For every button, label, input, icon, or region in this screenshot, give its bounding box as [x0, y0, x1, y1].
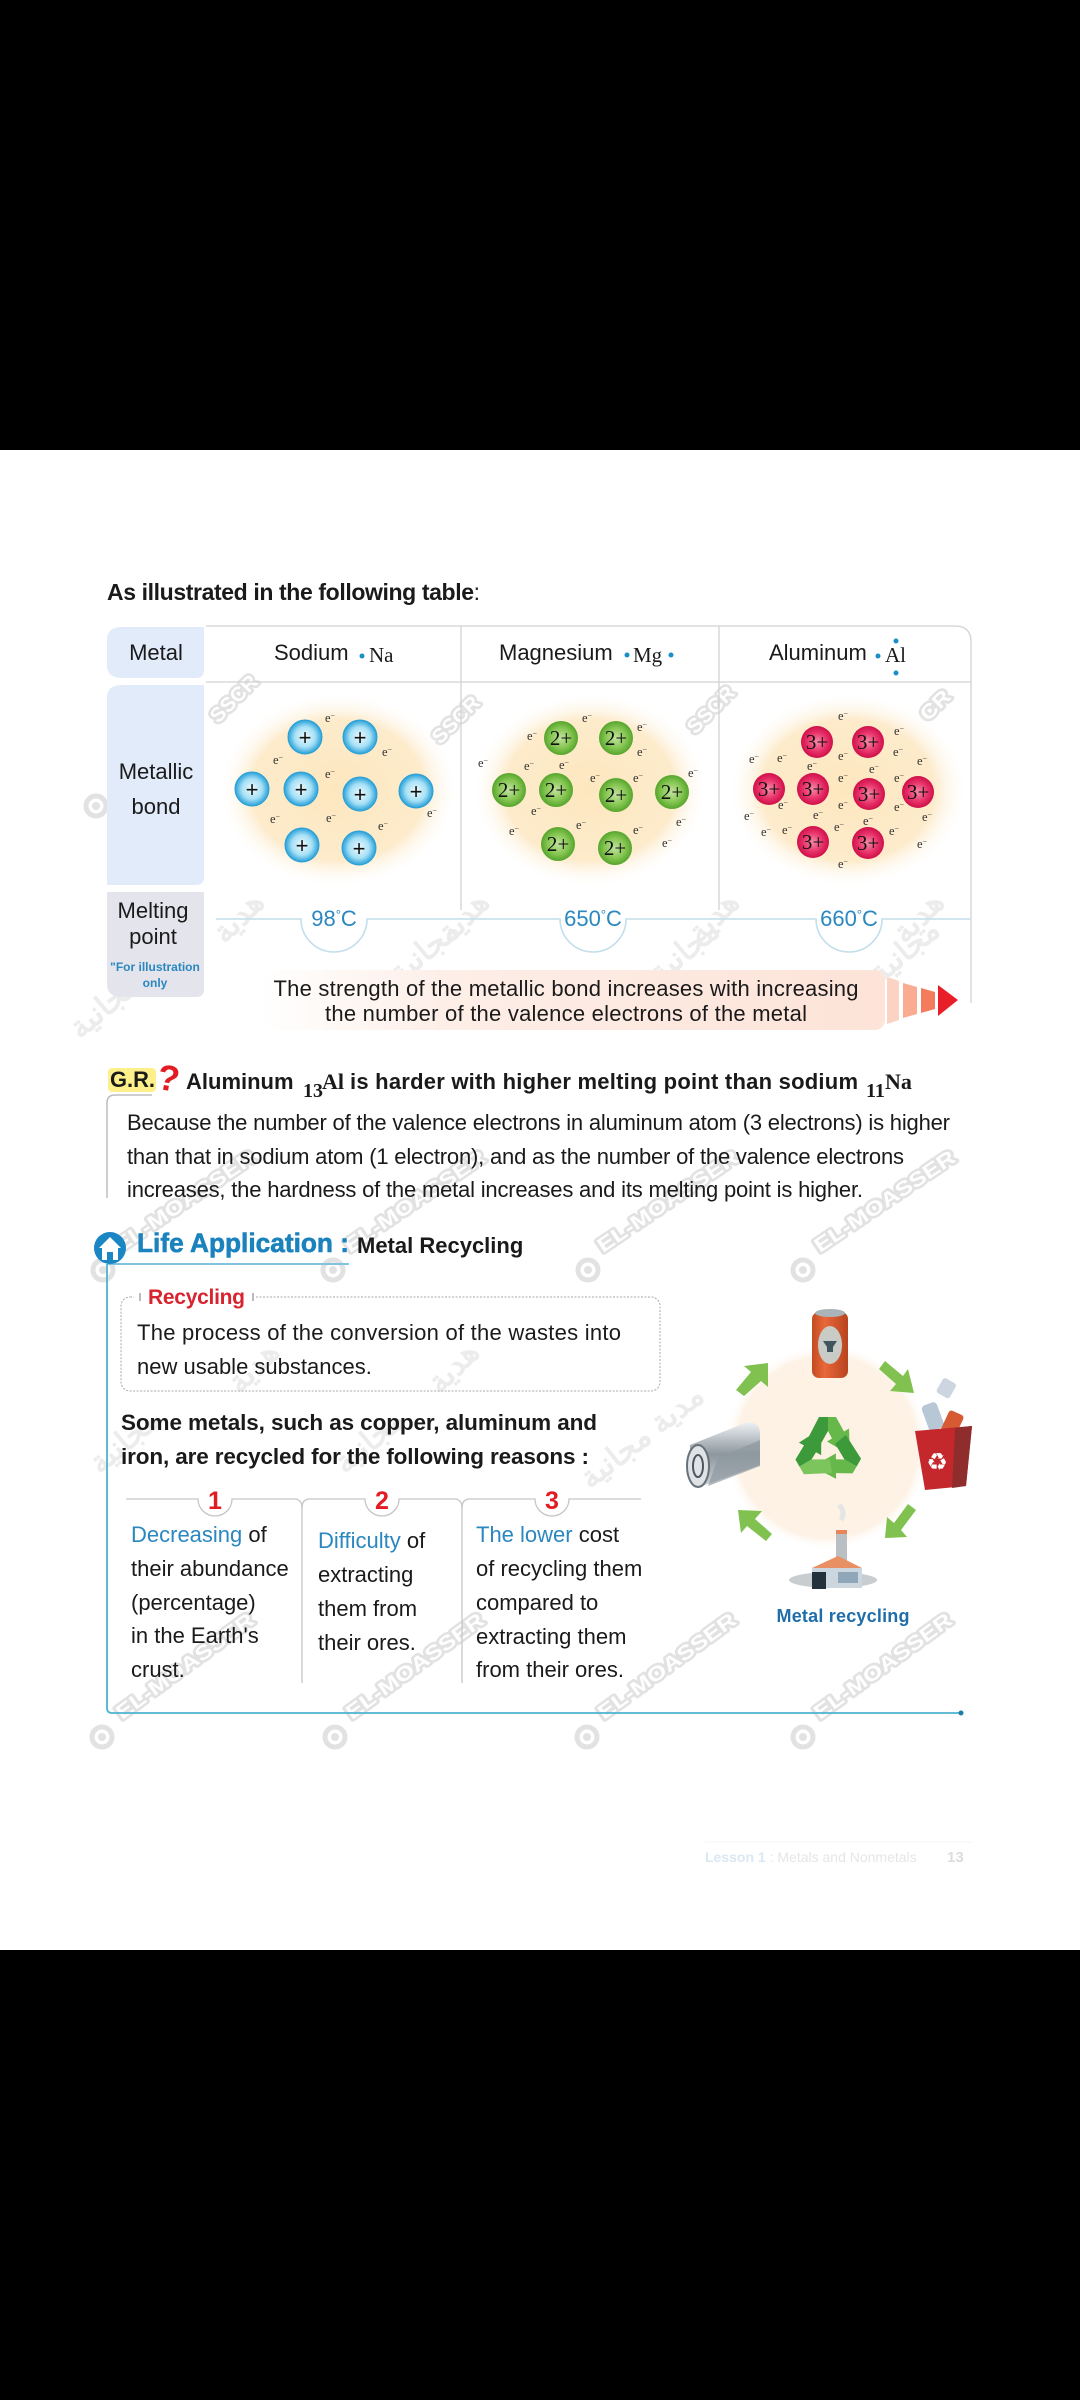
melting point scale: 650 [564, 906, 601, 931]
column header: Magnesium [499, 640, 674, 667]
row label: Metal [107, 627, 204, 678]
heading: life application [137, 1228, 523, 1258]
panel: recycling definition [121, 1286, 660, 1391]
reason 2: extracting [318, 1562, 413, 1587]
diagram: magnesium metallic bond: − [530, 759, 535, 768]
diagram: aluminum metallic bond: e [749, 752, 755, 766]
diagram: sodium metallic bond: e [273, 753, 279, 767]
G.R. answer bracket and text: than that in sodium atom (1 electron), and as the number of the valence electrons [127, 1144, 904, 1169]
G.R. answer bracket and text: Because the number of the valence electrons in aluminum atom (3 electrons) is higher [127, 1110, 950, 1135]
background glow [724, 1344, 930, 1550]
diagram: magnesium metallic bond: e [531, 804, 537, 818]
diagram: aluminum metallic bond: − [813, 759, 818, 768]
reason 2: their ores. [318, 1630, 416, 1655]
black band: bottom [0, 1950, 1080, 2400]
row label: Melting point [107, 892, 204, 997]
melting point scale: C [341, 906, 357, 931]
diagram: sodium metallic bond: + [295, 777, 307, 802]
diagram: magnesium metallic bond: 2+ [547, 832, 569, 856]
diagram: aluminum metallic bond: − [900, 724, 905, 733]
reason 1 [131, 1487, 289, 1682]
watermark layer: EL-MOASSER [810, 1146, 960, 1257]
diagram: magnesium metallic bond: e [559, 758, 565, 772]
reason 3: The lower cost [476, 1522, 619, 1547]
diagram: aluminum metallic bond: 3+ [857, 831, 879, 855]
diagram: aluminum metallic bond: 3+ [857, 730, 879, 754]
diagram: magnesium metallic bond: e [590, 771, 596, 785]
diagram: magnesium metallic bond: − [533, 729, 538, 738]
watermark layer: هدية [430, 884, 496, 950]
G.R. heading: Na [885, 1069, 912, 1094]
arrow: banner chevrons [887, 977, 958, 1024]
G.R. answer bracket and text [107, 1095, 950, 1202]
diagram: aluminum metallic bond [728, 692, 968, 888]
melting point scale: ° [601, 907, 606, 922]
watermark layer: مجانية [82, 1402, 166, 1480]
diagram: sodium metallic bond: + [354, 725, 366, 750]
reason 3: compared to [476, 1590, 598, 1615]
watermark layer: مجانية [642, 912, 726, 990]
reason 3: extracting them [476, 1624, 626, 1649]
diagram: aluminum metallic bond: 3+ [806, 730, 828, 754]
diagram: aluminum metallic bond: − [819, 808, 824, 817]
watermark layer: هدية [885, 884, 951, 950]
watermark layer: مدية مجانية [573, 1377, 710, 1496]
watermark layer: EL-MOASSER [594, 1609, 741, 1724]
diagram: aluminum metallic bond: − [869, 814, 874, 823]
diagram: magnesium metallic bond: e [576, 818, 582, 832]
diagram: aluminum metallic bond: e [894, 771, 900, 785]
diagram: sodium metallic bond: − [433, 806, 438, 815]
column header: Sodium: Sodium [274, 640, 349, 665]
heading: table intro: As illustrated in the following table: [107, 579, 480, 605]
diagram: aluminum metallic bond: e [813, 808, 819, 822]
reason 2: them from [318, 1596, 417, 1621]
icon: recycling symbol [788, 1417, 868, 1486]
column header: Magnesium: Magnesium [499, 640, 613, 665]
row label: Melting point: "For illustration [110, 960, 200, 974]
diagram: aluminum metallic bond: e [893, 745, 899, 759]
diagram: aluminum metallic bond: e [838, 857, 844, 871]
diagram: magnesium metallic bond: 2+ [605, 783, 627, 807]
reason 2 [318, 1487, 426, 1655]
watermark layer: هدية [220, 1334, 286, 1400]
diagram: sodium metallic bond: − [279, 753, 284, 762]
table frame [206, 626, 971, 1003]
diagram: aluminum metallic bond: e [917, 754, 923, 768]
banner: metallic bond strength: The strength of the metallic bond increases with increasing [274, 976, 858, 1001]
diagram: aluminum metallic bond: − [875, 762, 880, 771]
footer: page label [705, 1842, 972, 1866]
diagram: aluminum metallic bond: 3+ [802, 830, 824, 854]
panel frame: life application [107, 1264, 964, 1716]
icon: factory [789, 1505, 877, 1589]
text: reasons intro [121, 1410, 597, 1469]
diagram: magnesium metallic bond: − [588, 711, 593, 720]
G.R. badge: ? [154, 1056, 183, 1100]
column header: Aluminum: Aluminum [769, 640, 867, 665]
diagram: aluminum metallic bond: e [869, 762, 875, 776]
diagram: aluminum metallic bond: e [894, 800, 900, 814]
banner: metallic bond strength: the number of the valence electrons of the metal [325, 1001, 807, 1026]
row label: Melting point: point [129, 924, 177, 949]
melting point scale [216, 906, 971, 952]
diagram: aluminum metallic bond: e [863, 814, 869, 828]
diagram: sodium metallic bond: − [384, 819, 389, 828]
diagram: aluminum metallic bond: − [767, 825, 772, 834]
diagram: magnesium metallic bond: e [662, 836, 668, 850]
diagram: aluminum metallic bond: 3+ [907, 780, 929, 804]
watermark layer: مجانية [62, 967, 146, 1045]
G.R. heading: 11 [866, 1080, 885, 1102]
icon: home [94, 1232, 126, 1264]
diagram: magnesium metallic bond: e [582, 711, 588, 725]
diagram: sodium metallic bond: e [270, 812, 276, 826]
diagram: magnesium metallic bond: e [633, 823, 639, 837]
icon: metal roll [687, 1422, 760, 1487]
diagram: sodium metallic bond: e [326, 811, 332, 825]
G.R. badge: G.R. [110, 1067, 155, 1092]
black band: top [0, 0, 1080, 450]
diagram: aluminum metallic bond: − [928, 810, 933, 819]
G.R. heading: Aluminum [186, 1069, 294, 1094]
watermark layer: EL-MOASSER [340, 1146, 490, 1257]
row label: Melting point: Melting [118, 898, 188, 923]
reason 3: from their ores. [476, 1657, 624, 1682]
watermark layer: هدية [680, 884, 746, 950]
footer: page label: Lesson 1 : Metals and Nonmetals [705, 1849, 917, 1865]
figure caption: Metal recycling [776, 1606, 910, 1626]
reason 1: 1 [208, 1487, 222, 1515]
diagram: magnesium metallic bond: 2+ [604, 836, 626, 860]
diagram: sodium metallic bond: − [276, 812, 281, 821]
diagram: sodium metallic bond: e [382, 745, 388, 759]
reason 2: Difficulty of [318, 1528, 426, 1553]
diagram: sodium metallic bond: e [378, 819, 384, 833]
diagram: sodium metallic bond: − [331, 711, 336, 720]
diagram: magnesium metallic bond: e [509, 824, 515, 838]
diagram: aluminum metallic bond: e [838, 798, 844, 812]
diagram: aluminum metallic bond: 3+ [802, 777, 824, 801]
diagram: magnesium metallic bond: − [537, 804, 542, 813]
panel: recycling definition: Recycling [148, 1286, 245, 1309]
diagram: aluminum metallic bond: e [894, 724, 900, 738]
diagram: aluminum metallic bond: e [807, 759, 813, 773]
diagram: aluminum metallic bond: − [844, 749, 849, 758]
diagram: sodium metallic bond: e [325, 711, 331, 725]
reasons frame [126, 1499, 641, 1683]
diagram: sodium metallic bond: e [427, 806, 433, 820]
column header: Aluminum [769, 638, 906, 676]
diagram: magnesium metallic bond: 2+ [498, 778, 520, 802]
watermark layer: EL-MOASSER [112, 1609, 259, 1724]
diagram: aluminum metallic bond: − [844, 709, 849, 718]
text: reasons intro: iron, are recycled for the following reasons : [121, 1444, 589, 1469]
G.R. heading: is harder with higher melting point than sodium [350, 1069, 858, 1094]
reason 1: crust. [131, 1657, 185, 1682]
G.R. heading [186, 1069, 912, 1102]
diagram: magnesium metallic bond: − [668, 836, 673, 845]
diagram: magnesium metallic bond: e [478, 756, 484, 770]
row label: Metallic bond: bond [132, 794, 180, 819]
row label: Metal: Metal [129, 640, 183, 665]
diagram: magnesium metallic bond: − [565, 758, 570, 767]
diagram: aluminum metallic bond: − [899, 745, 904, 754]
text: reasons intro: Some metals, such as copper, aluminum and [121, 1410, 597, 1435]
diagram: sodium metallic bond: + [354, 782, 366, 807]
watermark layer: EL-MOASSER [810, 1609, 957, 1724]
diagram: sodium metallic bond: + [353, 836, 365, 861]
diagram: magnesium metallic bond: 2+ [545, 778, 567, 802]
diagram: magnesium metallic bond: e [527, 729, 533, 743]
diagram: magnesium metallic bond: − [582, 818, 587, 827]
diagram: magnesium metallic bond: − [694, 766, 699, 775]
diagram: magnesium metallic bond: − [643, 745, 648, 754]
watermark layer: مجانية [382, 912, 466, 990]
diagram: aluminum metallic bond: e [777, 751, 783, 765]
watermark layer: هدية [205, 884, 271, 950]
diagram: aluminum metallic bond: e [834, 820, 840, 834]
G.R. heading: Al [322, 1069, 344, 1094]
diagram: aluminum metallic bond: e [917, 837, 923, 851]
diagram: magnesium metallic bond: e [633, 771, 639, 785]
watermark layer: مجانية [862, 912, 946, 990]
diagram: aluminum metallic bond: − [900, 771, 905, 780]
reason 3: 3 [545, 1487, 559, 1515]
reason 1: (percentage) [131, 1590, 256, 1615]
icon: can [812, 1309, 848, 1378]
column header: Aluminum: Al [885, 643, 906, 667]
diagram: magnesium metallic bond: 2+ [550, 726, 572, 750]
diagram: magnesium metallic bond: − [682, 815, 687, 824]
watermark layer: EL-MOASSER [110, 1146, 260, 1257]
figure: metal recycling cycle [687, 1309, 972, 1626]
diagram: sodium metallic bond [218, 692, 458, 888]
diagram: aluminum metallic bond: e [838, 709, 844, 723]
diagram: magnesium metallic bond: − [639, 823, 644, 832]
diagram: aluminum metallic bond: − [923, 837, 928, 846]
diagram: aluminum metallic bond: − [895, 824, 900, 833]
diagram: aluminum metallic bond: − [844, 798, 849, 807]
watermark layer: مجانية [327, 1402, 411, 1480]
diagram: aluminum metallic bond: − [755, 752, 760, 761]
column header: Sodium [274, 640, 394, 667]
diagram: magnesium metallic bond: 2+ [661, 780, 683, 804]
reason 3: of recycling them [476, 1556, 642, 1581]
diagram: sodium metallic bond: − [388, 745, 393, 754]
melting point scale: ° [857, 907, 862, 922]
reason 3 [476, 1487, 642, 1682]
diagram: magnesium metallic bond: − [484, 756, 489, 765]
watermark layer: CR [916, 685, 956, 726]
diagram: aluminum metallic bond: e [838, 749, 844, 763]
reason 2: 2 [375, 1487, 389, 1515]
diagram: magnesium metallic bond: − [639, 771, 644, 780]
reason 1: their abundance [131, 1556, 289, 1581]
diagram: aluminum metallic bond: e [922, 810, 928, 824]
diagram: magnesium metallic bond: e [637, 720, 643, 734]
diagram: sodium metallic bond: + [410, 779, 422, 804]
melting point scale: C [862, 906, 878, 931]
banner: metallic bond strength [262, 970, 885, 1030]
arrow: bottom left [738, 1510, 772, 1541]
diagram: aluminum metallic bond: e [889, 824, 895, 838]
column header: Sodium: Na [369, 643, 394, 667]
panel: recycling definition: new usable substances. [137, 1354, 372, 1379]
panel: recycling definition: The process of the conversion of the wastes into [137, 1320, 621, 1345]
watermark layer: هدية [420, 1334, 486, 1400]
watermark layer: SSCR [683, 682, 740, 739]
diagram: aluminum metallic bond: − [844, 771, 849, 780]
heading: life application: Life Application : [137, 1228, 349, 1258]
diagram: magnesium metallic bond: e [524, 759, 530, 773]
reason 1: Decreasing of [131, 1522, 268, 1547]
G.R. badge [108, 1056, 183, 1100]
diagram: aluminum metallic bond: − [784, 798, 789, 807]
arrow: bottom right [885, 1504, 916, 1538]
diagram: magnesium metallic bond: e [688, 766, 694, 780]
melting point scale: 98 [311, 906, 336, 931]
diagram: aluminum metallic bond: − [840, 820, 845, 829]
diagram: magnesium metallic bond [472, 692, 708, 888]
melting point scale: 660 [820, 906, 857, 931]
row label: Melting point: only [143, 976, 168, 990]
diagram: magnesium metallic bond: 2+ [605, 726, 627, 750]
diagram: aluminum metallic bond: 3+ [858, 782, 880, 806]
icon: recycling bin with cans: ♻ [926, 1448, 948, 1476]
diagram: sodium metallic bond: − [332, 811, 337, 820]
watermark layer: SSCR [206, 671, 263, 728]
diagram: sodium metallic bond: − [331, 767, 336, 776]
diagram: aluminum metallic bond: − [750, 809, 755, 818]
diagram: aluminum metallic bond: e [744, 809, 750, 823]
melting point scale: C [606, 906, 622, 931]
diagram: magnesium metallic bond: e [637, 745, 643, 759]
diagram: aluminum metallic bond: e [778, 798, 784, 812]
row label: Metallic bond: Metallic [119, 759, 193, 784]
heading: life application: Metal Recycling [357, 1233, 523, 1258]
diagram: sodium metallic bond: + [296, 833, 308, 858]
reason 1: in the Earth's [131, 1623, 259, 1648]
G.R. answer bracket and text: increases, the hardness of the metal increases and its melting point is higher. [127, 1177, 863, 1202]
watermark layer: EL-MOASSER [342, 1609, 489, 1724]
diagram: aluminum metallic bond: − [844, 857, 849, 866]
diagram: aluminum metallic bond: − [788, 823, 793, 832]
diagram: aluminum metallic bond: e [838, 771, 844, 785]
arrow: top left [736, 1363, 768, 1396]
icon: recycling bin with cans [915, 1377, 972, 1490]
footer: page label: 13 [947, 1849, 964, 1866]
diagram: magnesium metallic bond: e [676, 815, 682, 829]
watermark layer: SSCR [428, 692, 485, 749]
diagram: sodium metallic bond: e [325, 767, 331, 781]
diagram: sodium metallic bond: + [299, 725, 311, 750]
diagram: magnesium metallic bond: − [515, 824, 520, 833]
watermark layer: EL-MOASSER [593, 1146, 743, 1257]
diagram: aluminum metallic bond: e [782, 823, 788, 837]
diagram: aluminum metallic bond: − [900, 800, 905, 809]
melting point scale: ° [336, 907, 341, 922]
diagram: aluminum metallic bond: − [783, 751, 788, 760]
diagram: aluminum metallic bond: e [761, 825, 767, 839]
G.R. heading: 13 [303, 1080, 323, 1102]
watermark layer [62, 671, 960, 1747]
column header: Magnesium: Mg [633, 643, 663, 667]
row label: Metallic bond [107, 685, 204, 885]
diagram: magnesium metallic bond: − [643, 720, 648, 729]
diagram: aluminum metallic bond: 3+ [758, 777, 780, 801]
diagram: sodium metallic bond: + [246, 777, 258, 802]
diagram: aluminum metallic bond: − [923, 754, 928, 763]
diagram: magnesium metallic bond: − [596, 771, 601, 780]
arrow: top right [879, 1361, 914, 1393]
